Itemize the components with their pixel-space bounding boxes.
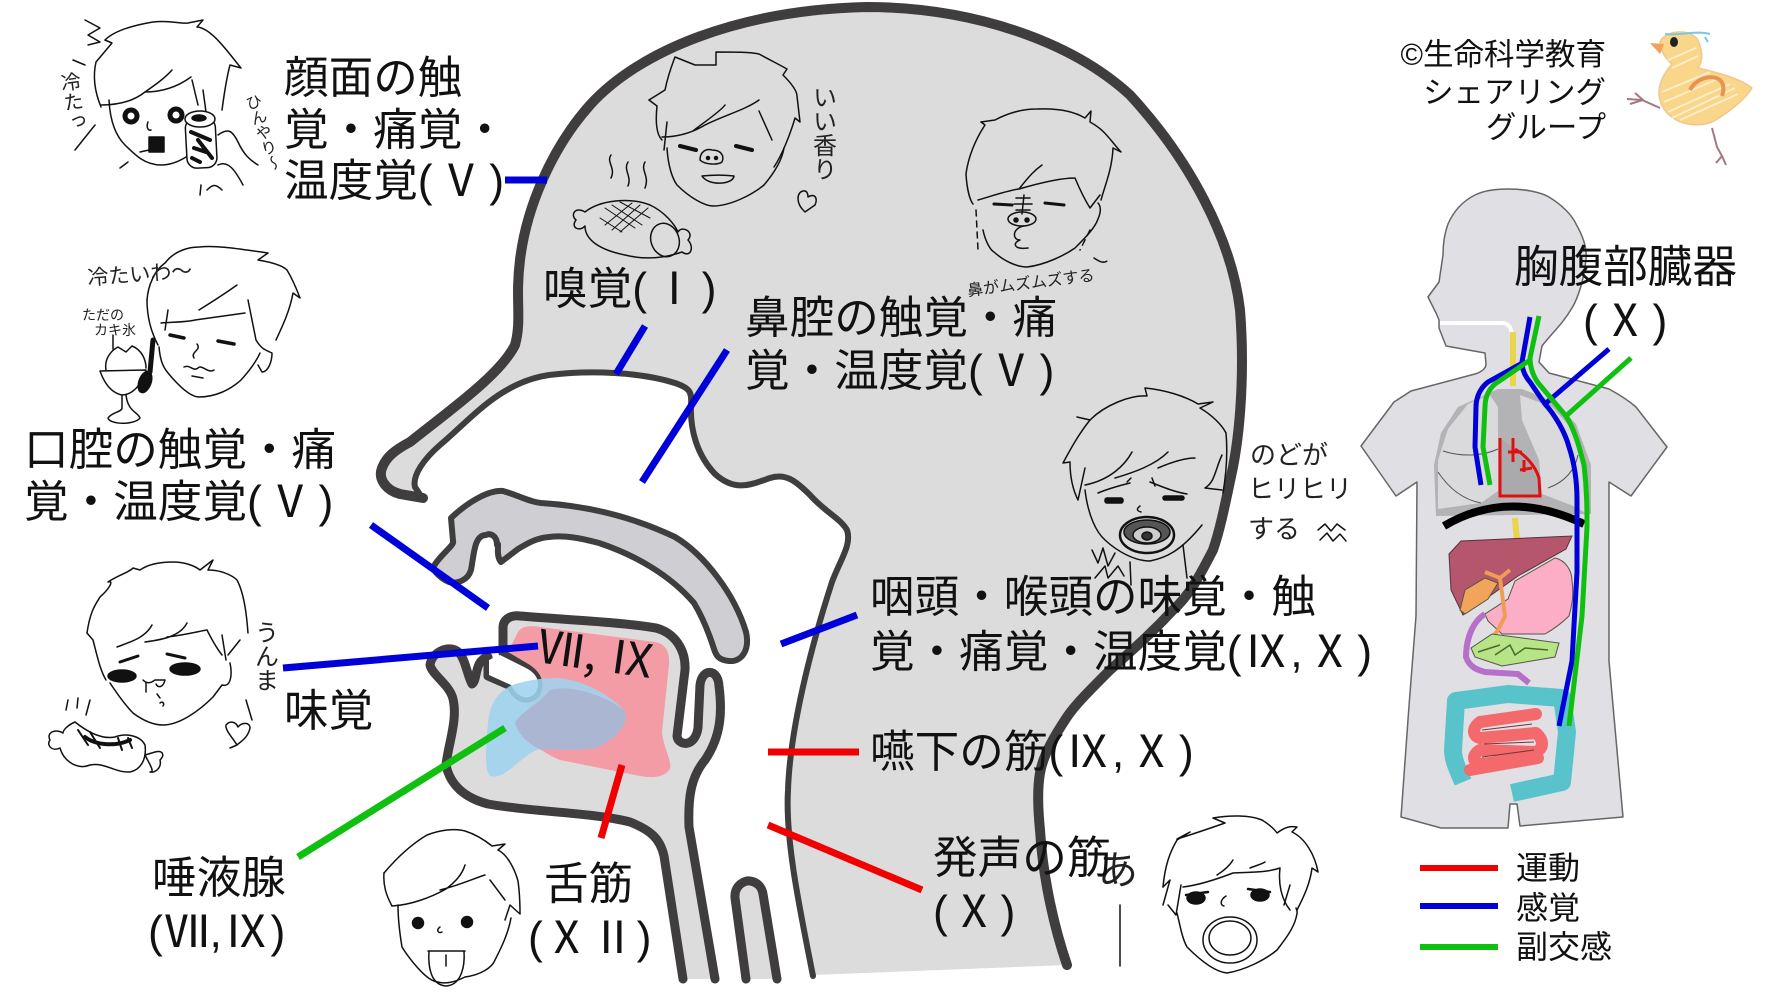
label: face sensation: 覚・痛覚・ bbox=[284, 106, 507, 155]
label: oral cavity sensation: 口腔の触覚・痛 bbox=[24, 426, 336, 475]
pointer: smell bbox=[616, 326, 645, 374]
legend: motor: 運動 bbox=[1516, 850, 1580, 886]
green parasympathetic nerve bbox=[1483, 316, 1631, 726]
anatomical head cross-section bbox=[381, 7, 1242, 979]
esophagus lower bbox=[1515, 518, 1523, 563]
handwritten: just shaved ice: ただの bbox=[82, 307, 124, 323]
pointer: nasal cavity bbox=[642, 350, 727, 482]
handwritten: cold: 冷たっ bbox=[56, 70, 87, 133]
palate bbox=[434, 491, 747, 661]
pancreas bbox=[1471, 634, 1559, 666]
tongue muscle region bbox=[508, 626, 670, 777]
pointer lines bbox=[283, 180, 922, 890]
face: itchy nose bbox=[966, 109, 1121, 267]
label: thoracoabdominal organs: 胸腹部臓器 bbox=[1514, 243, 1737, 292]
gland and tongue overlap bbox=[515, 688, 626, 750]
pointer: face sensation bbox=[505, 176, 547, 184]
legend: parasympathetic: 副交感 bbox=[1516, 929, 1612, 965]
face: saying ah bbox=[1163, 816, 1318, 973]
stomach bbox=[1485, 558, 1573, 634]
handwritten: long vowel mark bbox=[1119, 905, 1121, 966]
blue sensory nerve bbox=[1475, 317, 1609, 726]
label: swallowing muscle: 嚥下の筋(Ⅸ,Ⅹ) bbox=[870, 715, 1194, 780]
label: nasal cavity sensation: 覚・温度覚(Ⅴ) bbox=[745, 334, 1054, 399]
pointer: swallowing muscle bbox=[768, 748, 859, 756]
legend: sensory: 感覚 bbox=[1516, 890, 1580, 926]
face: tongue out bbox=[384, 830, 520, 986]
handwritten: nice smell: いい香り bbox=[808, 85, 836, 181]
handwritten: nose tickles: 鼻がムズムズする bbox=[966, 267, 1096, 300]
copyright text: グループ bbox=[1486, 111, 1606, 145]
label: thoracoabdominal organs: (Ⅹ) bbox=[1583, 284, 1667, 349]
pointer: oral cavity bbox=[371, 525, 488, 608]
body diagram with organs bbox=[1361, 189, 1667, 828]
colon bbox=[1453, 694, 1567, 793]
handwritten: throat stings: ヒリヒリ bbox=[1248, 474, 1352, 504]
handwritten: ah: あ bbox=[1098, 849, 1138, 893]
face: cold can on cheek bbox=[73, 20, 258, 195]
label: phonation muscle: (Ⅹ) bbox=[933, 875, 1015, 940]
copyright text: ©生命科学教育 bbox=[1401, 38, 1606, 72]
label: tongue muscle: 舌筋 bbox=[544, 860, 633, 909]
salivary gland region bbox=[486, 678, 626, 777]
label: oral cavity sensation: 覚・温度覚(Ⅴ) bbox=[24, 465, 333, 530]
larynx tube bbox=[735, 881, 777, 979]
under-jaw gap bbox=[1440, 323, 1512, 334]
face: pleasant smell bbox=[573, 52, 816, 261]
label: phonation muscle: 発声の筋 bbox=[933, 834, 1111, 883]
handwritten: throat stings: のどが bbox=[1250, 440, 1328, 470]
lung fissures bbox=[1438, 449, 1578, 503]
handwritten: chilly: ひんやり〜 bbox=[241, 92, 283, 174]
pointer: pharynx bbox=[781, 615, 857, 644]
left lung bbox=[1438, 395, 1498, 509]
label: VII, IX taste nerves: Ⅶ, Ⅸ bbox=[534, 611, 661, 692]
label: taste: 味覚 bbox=[284, 687, 373, 736]
label: smell: 嗅覚(Ⅰ) bbox=[543, 252, 717, 317]
handwritten: just shaved ice: カキ氷 bbox=[94, 322, 136, 338]
diaphragm bbox=[1444, 506, 1584, 526]
label: pharynx and larynx sensation: 咽頭・喉頭の味覚・触 bbox=[870, 573, 1316, 622]
pointer: salivary gland bbox=[298, 728, 505, 857]
label: tongue muscle: (ⅩⅡ) bbox=[528, 901, 653, 966]
heart bbox=[1500, 438, 1540, 496]
chest rim bbox=[1434, 389, 1591, 516]
duodenum bbox=[1466, 614, 1529, 683]
gallbladder bbox=[1460, 578, 1498, 614]
head fill bbox=[381, 7, 1242, 975]
copyright text: シェアリング bbox=[1423, 76, 1606, 110]
esophagus upper bbox=[1510, 332, 1516, 386]
head outer outline bbox=[381, 7, 1242, 965]
handwritten: throat stings: する bbox=[1248, 514, 1300, 544]
mouth opening highlight bbox=[489, 655, 538, 697]
face: sore throat bbox=[1063, 388, 1346, 585]
bile duct bbox=[1483, 570, 1510, 650]
lower jaw and tongue bbox=[430, 616, 721, 979]
handwritten: yummy: うんま bbox=[250, 620, 278, 692]
label: face sensation: 温度覚(Ⅴ) bbox=[284, 144, 504, 209]
legend bbox=[1420, 850, 1612, 965]
label: salivary gland: 唾液腺 bbox=[152, 854, 286, 903]
right lung bbox=[1520, 395, 1587, 514]
label: pharynx and larynx sensation: 覚・痛覚・温度覚(Ⅸ,Ⅹ) bbox=[870, 615, 1372, 680]
small intestine bbox=[1470, 714, 1542, 770]
label: nasal cavity sensation: 鼻腔の触覚・痛 bbox=[745, 294, 1057, 343]
label: salivary gland: (Ⅶ,Ⅸ) bbox=[148, 895, 285, 960]
label: face sensation: 顔面の触 bbox=[284, 54, 462, 103]
pointer: taste bbox=[283, 646, 538, 668]
face: tasty bbox=[49, 560, 252, 772]
handwritten: it's cold: 冷たいわ〜 bbox=[87, 260, 193, 290]
liver bbox=[1449, 536, 1572, 615]
pointer: phonation muscle bbox=[768, 825, 922, 890]
body silhouette bbox=[1361, 189, 1667, 828]
pointer: tongue muscle bbox=[601, 765, 622, 838]
face: shaved ice headache bbox=[100, 247, 300, 423]
nasal cavity and pharynx wall bbox=[415, 372, 848, 976]
icon: chick mascot bbox=[1627, 32, 1752, 165]
